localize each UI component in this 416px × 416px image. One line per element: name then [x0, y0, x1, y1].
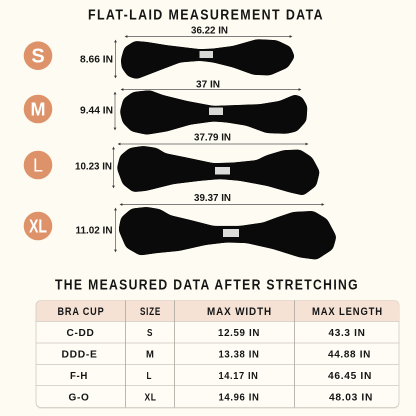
- arrows M: [115, 90, 300, 129]
- row F-H: F-H: [70, 370, 88, 382]
- table header: MAX LENGTH: [312, 306, 383, 318]
- height label XL: 11.02 IN: [76, 224, 112, 236]
- icon: size badge L: [24, 151, 52, 179]
- height label S: 8.66 IN: [80, 54, 113, 66]
- size row XL: [24, 192, 336, 259]
- row DDD-E: 44.88 IN: [328, 348, 371, 360]
- width label XL: 39.37 IN: [194, 192, 231, 204]
- icon: size badge M: M: [30, 100, 46, 120]
- table header: MAX WIDTH: [207, 306, 272, 318]
- table body: [36, 300, 399, 409]
- arrows S: [116, 36, 291, 77]
- height label M: 9.44 IN: [80, 104, 113, 116]
- row DDD-E: 13.38 IN: [218, 348, 260, 360]
- table header: [58, 306, 383, 318]
- row F-H: L: [146, 370, 152, 382]
- row F-H: [70, 370, 372, 382]
- row C-DD: [66, 327, 366, 339]
- width label M: 37 IN: [196, 79, 220, 91]
- height label L: 10.23 IN: [75, 160, 112, 172]
- row C-DD: C-DD: [66, 327, 94, 339]
- table header: BRA CUP: [58, 306, 104, 318]
- size row L: [24, 132, 319, 195]
- icon: size badge S: S: [31, 46, 45, 68]
- row G-O: XL: [144, 392, 156, 404]
- width label L: 37.79 IN: [194, 132, 231, 144]
- icon: size badge L: L: [33, 156, 43, 176]
- row G-O: [68, 392, 373, 404]
- row DDD-E: M: [146, 348, 154, 360]
- row C-DD: 43.3 IN: [328, 327, 366, 339]
- row F-H: 46.45 IN: [328, 370, 372, 382]
- size row M: [24, 79, 307, 134]
- icon: size badge XL: [24, 212, 52, 240]
- garment S: [122, 40, 294, 78]
- garment L: [118, 147, 319, 195]
- title: flat-laid measurement data: FLAT-LAID MEASUREMENT DATA: [88, 8, 324, 24]
- row G-O: 48.03 IN: [329, 392, 373, 404]
- arrows L: [114, 144, 307, 187]
- icon: size badge M: [24, 95, 52, 123]
- heading: measured data after stretching: THE MEASURED DATA AFTER STRETCHING: [55, 278, 359, 294]
- row F-H: 14.17 IN: [218, 370, 258, 382]
- row DDD-E: [62, 348, 371, 360]
- garment M: [121, 91, 307, 134]
- arrows XL: [116, 204, 323, 251]
- row DDD-E: DDD-E: [62, 348, 98, 360]
- garment XL: [119, 208, 336, 259]
- icon: size badge XL: XL: [29, 216, 47, 236]
- row C-DD: 12.59 IN: [218, 327, 260, 339]
- table header: SIZE: [140, 306, 161, 318]
- table: [36, 300, 399, 409]
- width label S: 36.22 IN: [191, 24, 228, 36]
- size row S: [24, 24, 294, 78]
- row C-DD: S: [147, 327, 153, 339]
- row G-O: 14.96 IN: [218, 392, 260, 404]
- row G-O: G-O: [68, 392, 90, 404]
- icon: size badge S: [24, 41, 52, 70]
